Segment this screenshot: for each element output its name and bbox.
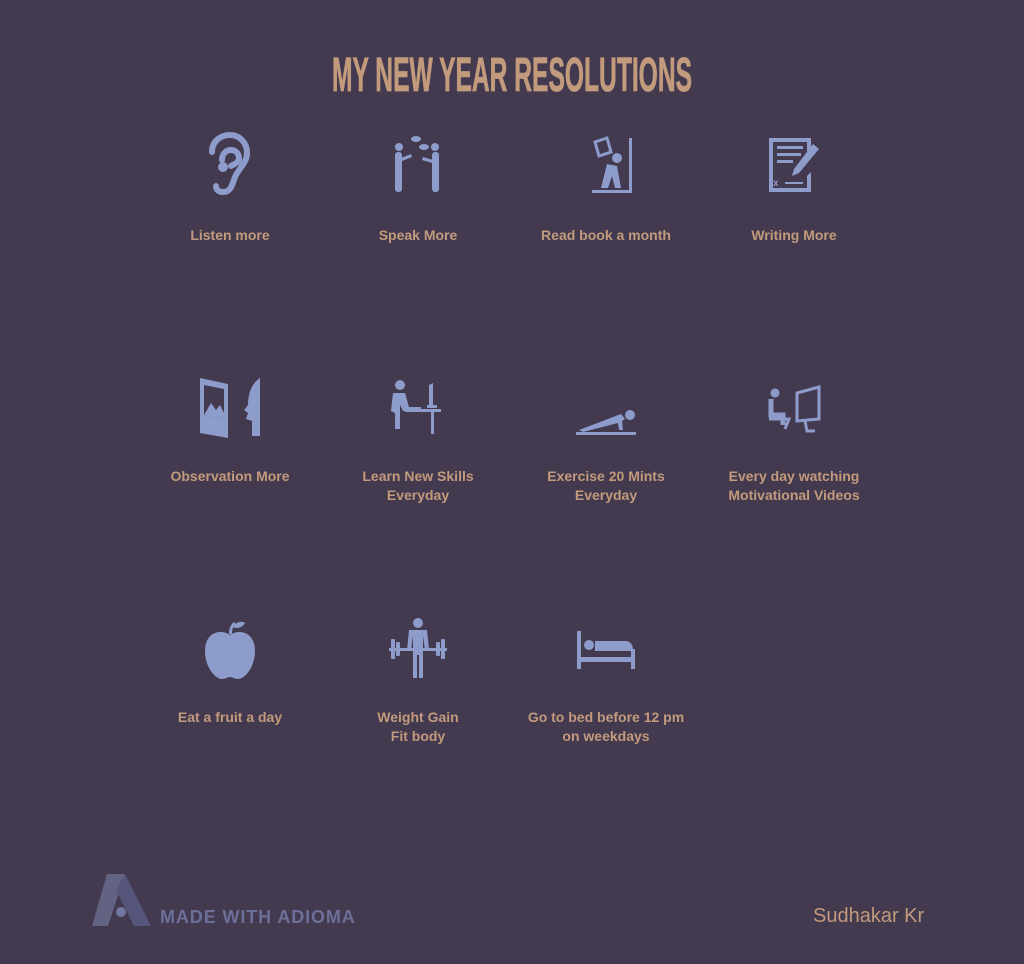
label: apple: Eat a fruit a day	[178, 709, 282, 725]
icon: apple	[205, 622, 255, 679]
label: speak: Speak More	[379, 227, 457, 243]
label: learn: Everyday	[387, 487, 449, 503]
icon: speak	[395, 136, 439, 192]
label: videos: Every day watching	[729, 468, 859, 484]
icon: weight	[389, 618, 447, 678]
label: read: Read book a month	[541, 227, 671, 243]
icon: writing	[769, 138, 819, 192]
label: learn	[362, 468, 474, 503]
icon: observation	[200, 378, 260, 438]
label: listen: Listen more	[190, 227, 270, 243]
label: videos: Motivational Videos	[728, 487, 860, 503]
label: learn: Learn New Skills	[362, 468, 474, 484]
label: weight: Weight Gain	[377, 709, 459, 725]
label: exercise: Exercise 20 Mints	[547, 468, 665, 484]
label: exercise: Everyday	[575, 487, 637, 503]
icon: ear	[209, 132, 250, 195]
icon: writing: x	[773, 178, 779, 189]
icon: videos	[768, 385, 820, 432]
label: weight	[377, 709, 459, 744]
label: writing: Writing More	[751, 227, 837, 243]
label: observation: Observation More	[170, 468, 290, 484]
title: MY NEW YEAR RESOLUTIONS	[332, 49, 692, 102]
label: bed: on weekdays	[562, 728, 650, 744]
icon: learn	[391, 380, 441, 434]
author: Sudhakar Kr	[813, 905, 924, 927]
icon: exercise	[576, 410, 636, 435]
label: bed	[528, 709, 684, 744]
label: videos	[728, 468, 860, 503]
logo: made with adioma: MADE WITH ADIOMA	[160, 907, 356, 927]
label: weight: Fit body	[391, 728, 445, 744]
icon: bed	[577, 631, 635, 669]
icon: read	[592, 136, 632, 193]
logo: made with adioma	[92, 874, 356, 927]
label: exercise	[547, 468, 665, 503]
label: bed: Go to bed before 12 pm	[528, 709, 684, 725]
